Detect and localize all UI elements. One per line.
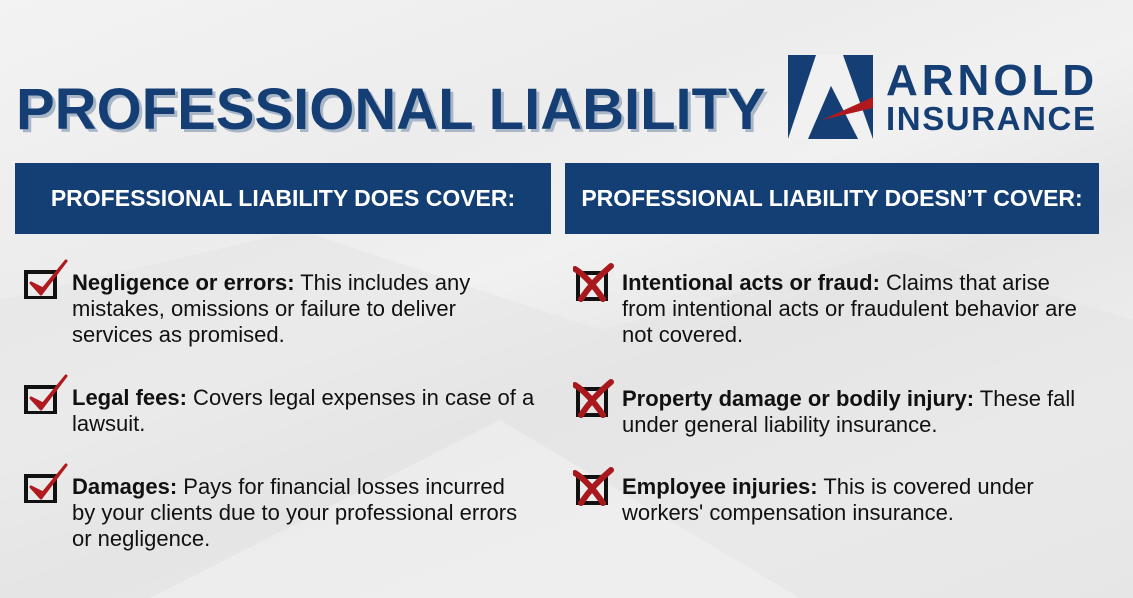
icon: logo mark — [788, 55, 873, 139]
item: property damage — [573, 379, 1075, 437]
item: negligence — [24, 259, 470, 347]
logo text: ARNOLD — [886, 56, 1098, 105]
header: doesn't cover: PROFESSIONAL LIABILITY DOESN’T COVER: — [581, 185, 1083, 211]
list: covered — [24, 259, 534, 551]
item: legal fees: Legal fees: Covers legal expenses in case of a — [72, 385, 534, 410]
item: legal fees: lawsuit. — [72, 411, 145, 436]
item: property damage: under general liability insurance. — [622, 412, 938, 437]
header: does cover — [15, 163, 551, 234]
item: intentional acts: not covered. — [622, 322, 743, 347]
logo — [788, 55, 1098, 139]
icon: x — [573, 263, 614, 302]
icon: x — [573, 467, 614, 506]
item: intentional acts — [573, 263, 1077, 347]
item: damages: by your clients due to your professional errors — [72, 500, 517, 525]
item: employee injuries — [573, 467, 1034, 525]
item: property damage: Property damage or bodily injury: These fall — [622, 386, 1075, 411]
item: damages — [24, 463, 517, 551]
icon: check — [24, 259, 68, 299]
header: doesn't cover — [565, 163, 1099, 234]
item: intentional acts: from intentional acts or fraudulent behavior are — [622, 296, 1077, 321]
item: negligence: Negligence or errors: This includes any — [72, 270, 470, 295]
icon: x — [573, 379, 614, 418]
item: intentional acts: Intentional acts or fraud: Claims that arise — [622, 270, 1050, 295]
item: legal fees — [24, 374, 534, 436]
icon: check — [24, 463, 68, 503]
logo: INSURANCE — [886, 100, 1097, 137]
icon: check — [24, 374, 68, 414]
item: damages: or negligence. — [72, 526, 210, 551]
title: PROFESSIONAL LIABILITY — [16, 77, 766, 142]
item: employee injuries: workers' compensation insurance. — [622, 500, 954, 525]
item: employee injuries: Employee injuries: This is covered under — [622, 474, 1034, 499]
item: damages: Damages: Pays for financial losses incurred — [72, 474, 505, 499]
header: does cover: PROFESSIONAL LIABILITY DOES COVER: — [51, 185, 515, 211]
item: negligence: mistakes, omissions or failure to deliver — [72, 296, 456, 321]
item: negligence: services as promised. — [72, 322, 285, 347]
list: not covered — [573, 263, 1077, 525]
